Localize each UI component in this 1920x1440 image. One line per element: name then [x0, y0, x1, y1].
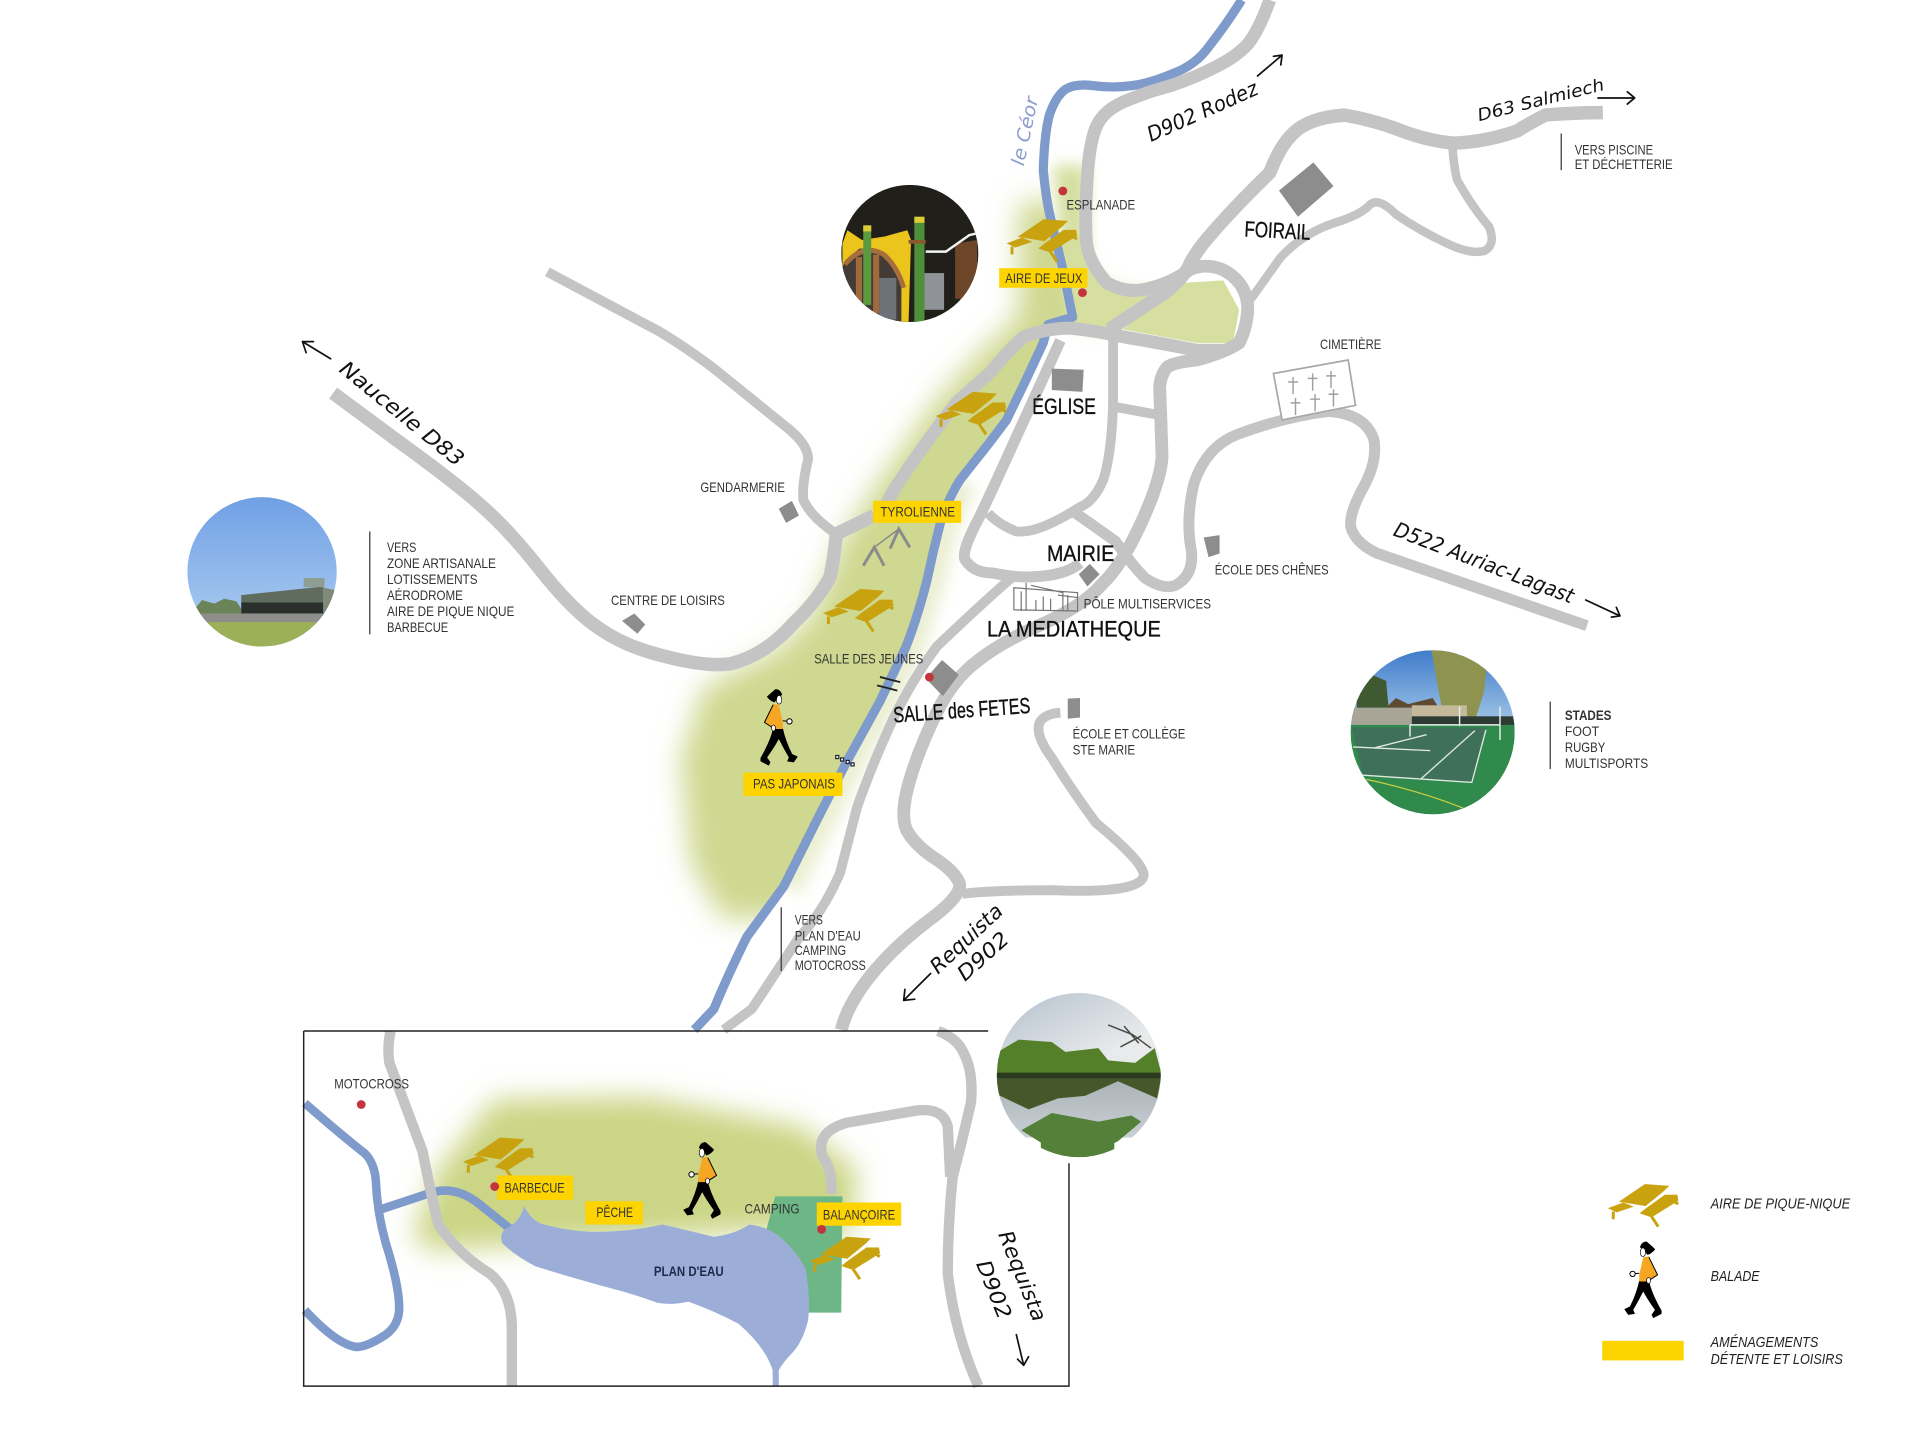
legend icon: walker	[1624, 1242, 1662, 1318]
note: stades: STADES	[1565, 707, 1611, 723]
handwritten road labels: D902 Rodez	[1143, 76, 1262, 147]
camping zone	[767, 1196, 842, 1313]
note: stades: RUGBY	[1565, 739, 1606, 755]
legend label: balade: BALADE	[1711, 1269, 1760, 1285]
inset red dots	[357, 1100, 826, 1234]
handwritten road labels: Requista	[993, 1227, 1051, 1325]
inset green area	[413, 1097, 857, 1250]
cemetery plot	[1273, 360, 1356, 420]
legend swatch: yellow	[1602, 1341, 1684, 1360]
note: stades: FOOT	[1565, 723, 1600, 739]
handwritten place names: MAIRIE	[1047, 541, 1114, 566]
green valley area	[681, 165, 1239, 918]
red location dots	[925, 187, 1087, 682]
note: vers plan d'eau: VERS	[795, 911, 823, 927]
yellow labels: BARBECUE	[504, 1180, 564, 1196]
handwritten road labels: D63 Salmiech	[1476, 75, 1606, 126]
place names: GENDARMERIE	[700, 479, 785, 495]
note: stades	[1550, 702, 1648, 771]
place names: CIMETIÈRE	[1320, 336, 1381, 352]
note: zone artisanale: BARBECUE	[387, 619, 448, 635]
place names: STE MARIE	[1073, 741, 1135, 757]
legend label: aménagements	[1710, 1334, 1843, 1368]
legend	[1602, 1184, 1850, 1368]
place names: ESPLANADE	[1067, 196, 1135, 212]
inset river	[305, 1103, 509, 1347]
legend label: aménagements: AMÉNAGEMENTS	[1710, 1334, 1819, 1351]
photo: sports courts	[1351, 650, 1515, 816]
note: zone artisanale: AÉRODROME	[387, 587, 463, 603]
legend label: aménagements: DÉTENTE ET LOISIRS	[1711, 1351, 1843, 1368]
legend label: picnic: AIRE DE PIQUE-NIQUE	[1710, 1197, 1850, 1213]
photo: lake	[997, 993, 1161, 1158]
handwritten road labels: D902	[971, 1257, 1016, 1322]
inset map frame	[304, 1031, 1069, 1386]
icon: médiathèque sketch	[1014, 583, 1078, 611]
yellow labels: PÊCHE	[596, 1204, 633, 1220]
yellow labels: BALANÇOIRE	[823, 1207, 895, 1223]
icon: stepping stones	[836, 756, 854, 766]
note: vers plan d'eau	[781, 907, 866, 973]
picnic icon: near église	[936, 392, 1006, 434]
buildings	[622, 162, 1333, 719]
note: zone artisanale: VERS	[387, 539, 416, 555]
photo: playground	[841, 185, 978, 322]
place names: CAMPING	[744, 1200, 800, 1216]
walker icon: main map	[760, 689, 798, 766]
handwritten place names: LA MEDIATHEQUE	[987, 617, 1161, 642]
picnic icon: inset camping	[810, 1237, 880, 1279]
handwritten road labels: D522 Auriac-Lagast	[1390, 517, 1578, 609]
picnic icon: aire de jeux	[1007, 219, 1077, 262]
yellow labels	[497, 268, 1087, 1226]
place names: ÉCOLE ET COLLÈGE	[1073, 725, 1185, 741]
note: zone artisanale: AIRE DE PIQUE NIQUE	[387, 603, 514, 619]
note: zone artisanale	[370, 531, 514, 635]
handwritten place names: FOIRAIL	[1244, 216, 1311, 245]
note: stades: MULTISPORTS	[1565, 755, 1648, 771]
yellow labels: TYROLIENNE	[880, 504, 955, 520]
walker icon: inset	[683, 1142, 721, 1219]
note: vers plan d'eau: CAMPING	[795, 942, 846, 958]
note: zone artisanale: ZONE ARTISANALE	[387, 555, 496, 571]
note: vers plan d'eau: MOTOCROSS	[795, 957, 866, 973]
inset roads	[388, 1031, 978, 1386]
handwritten place names: ÉGLISE	[1032, 394, 1096, 419]
place names: MOTOCROSS	[334, 1076, 409, 1092]
place names: ÉCOLE DES CHÊNES	[1215, 561, 1329, 577]
handwritten road labels: Naucelle D83	[335, 356, 469, 471]
legend icon: picnic	[1608, 1184, 1678, 1227]
place names: PLAN D'EAU	[654, 1263, 724, 1279]
icon: footbridge	[875, 671, 902, 697]
note: zone artisanale: LOTISSEMENTS	[387, 571, 478, 587]
place names	[334, 196, 1381, 1279]
handwritten road labels	[302, 55, 1635, 1365]
handwritten road labels: le Céor	[1008, 93, 1043, 168]
picnic icon: tyrolienne	[823, 589, 893, 631]
photo: aerodrome	[187, 496, 339, 649]
note: vers plan d'eau: PLAN D'EAU	[795, 927, 861, 943]
note: vers piscine: ET DÉCHETTERIE	[1575, 156, 1673, 172]
plan d'eau lake	[501, 1206, 809, 1386]
place names: CENTRE DE LOISIRS	[611, 592, 725, 608]
place names: SALLE DES JEUNES	[814, 651, 923, 667]
note: vers piscine	[1561, 133, 1673, 172]
picnic icon: inset barbecue	[463, 1138, 533, 1180]
handwritten road labels: D902	[952, 927, 1014, 986]
icon: tyrolienne	[863, 529, 910, 566]
note: vers piscine: VERS PISCINE	[1575, 141, 1653, 157]
river: le Céor	[694, 0, 1242, 1030]
handwritten road labels: Requista	[925, 899, 1008, 978]
yellow labels: PAS JAPONAIS	[753, 776, 835, 792]
handwritten place names	[892, 216, 1311, 727]
handwritten place names: SALLE des FETES	[892, 693, 1031, 727]
road network	[333, 0, 1603, 1030]
yellow labels: AIRE DE JEUX	[1005, 270, 1083, 286]
place names: PÔLE MULTISERVICES	[1084, 596, 1211, 612]
